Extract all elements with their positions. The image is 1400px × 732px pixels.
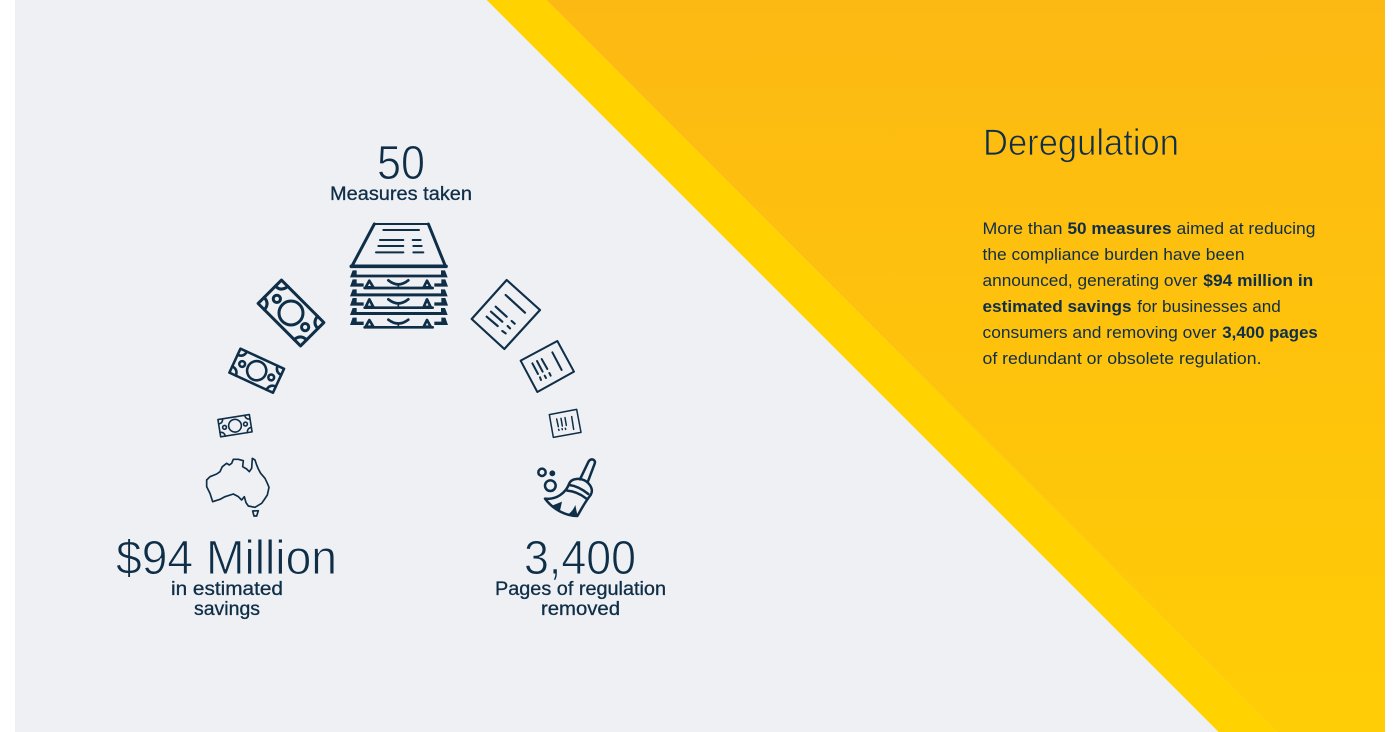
icon: map of Australia [207, 458, 269, 516]
body text block: 50 measures [1068, 220, 1172, 238]
body text block: aimed at reducing [1176, 220, 1316, 238]
stat: $94 million in estimated savings: $94 Million [116, 532, 337, 585]
body text block: estimated savings [982, 298, 1132, 316]
body text block [982, 220, 1318, 368]
icon: medium banknote [229, 349, 284, 393]
gold diagonal panel [547, 0, 1385, 732]
stacked sheets [350, 270, 448, 327]
body text block: of redundant or obsolete regulation. [982, 350, 1262, 368]
icon: small page [549, 409, 581, 437]
top document sheet [351, 224, 446, 266]
stat: 3,400 pages of regulation removed: 3,400 [524, 532, 636, 585]
icon: large page [472, 280, 540, 349]
yellow diagonal stripe [487, 0, 1277, 732]
icon: broom with bubbles [538, 459, 595, 516]
body text block: announced, generating over [982, 272, 1198, 290]
stat: $94 million in estimated savings: in estimated [171, 579, 283, 600]
icon: large banknote [258, 280, 324, 346]
stat: 3,400 pages of regulation removed: removed [541, 599, 620, 620]
stat: 3,400 pages of regulation removed: Pages of regulation [495, 579, 666, 600]
body text block: the compliance burden have been [982, 246, 1244, 264]
stat: 3,400 pages of regulation removed [495, 532, 666, 620]
body text block: consumers and removing over [982, 324, 1217, 342]
body text block: for businesses and [1137, 298, 1281, 316]
stat: 50 measures taken: 50 [377, 137, 425, 190]
icon: medium page [521, 341, 574, 392]
stat: $94 million in estimated savings [116, 532, 337, 620]
body text block: More than [982, 220, 1062, 238]
stat: $94 million in estimated savings: savings [194, 599, 260, 620]
body text block: $94 million in [1203, 272, 1313, 290]
stat: 50 measures taken [330, 137, 472, 205]
body text block: 3,400 pages [1222, 324, 1318, 342]
heading: Deregulation: Deregulation [983, 122, 1179, 163]
stat: 50 measures taken: Measures taken [330, 184, 472, 205]
icon: stack of documents [350, 224, 448, 327]
icon: small banknote [218, 415, 252, 437]
